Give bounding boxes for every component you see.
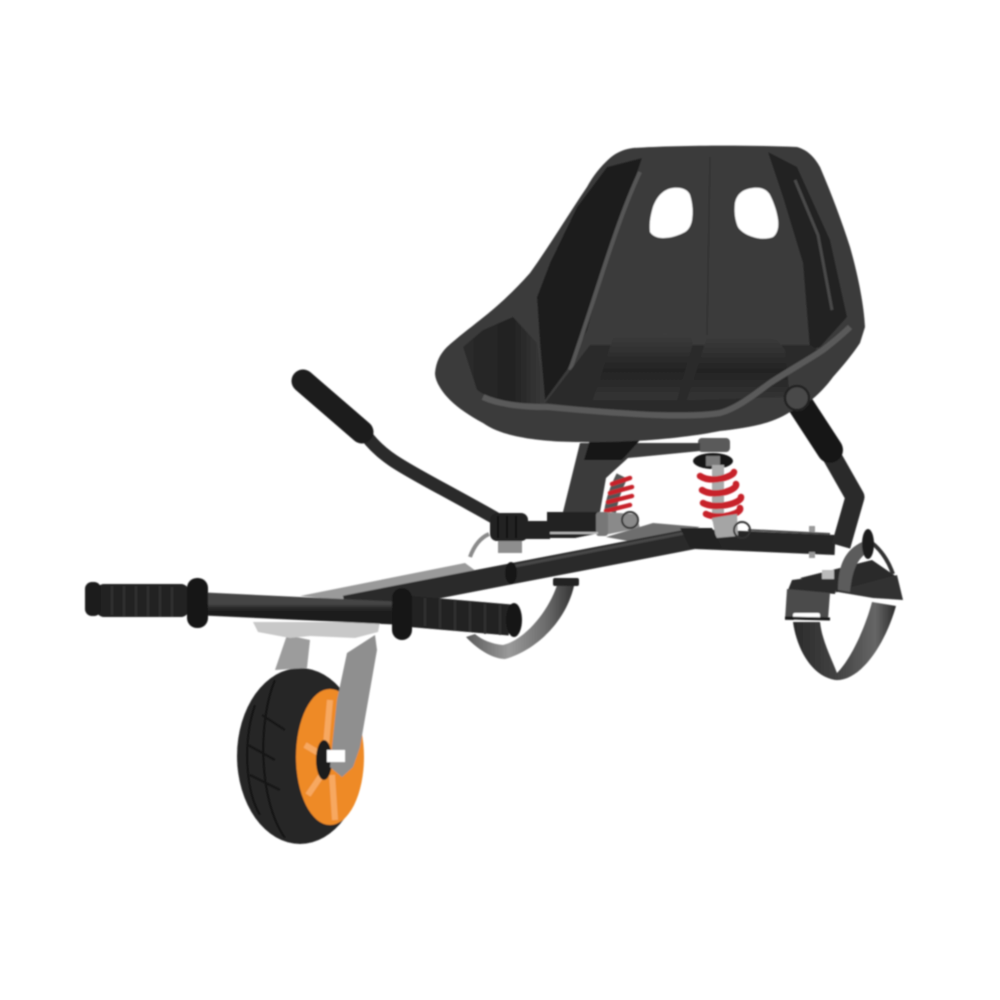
seat seam [707, 157, 710, 335]
seat pivot bolt [785, 386, 809, 410]
seat harness hole right [735, 188, 778, 239]
front fork [253, 622, 380, 777]
seat pan floor [545, 345, 820, 412]
seat left lobe [463, 317, 545, 407]
seat support bracket [563, 440, 700, 512]
steering lever [303, 381, 495, 518]
right foot bracket [785, 529, 903, 620]
seat shell [435, 146, 865, 442]
rear axle tube [695, 526, 835, 560]
rear seat support arm [800, 404, 855, 546]
seat back highlight [570, 172, 640, 370]
front wheel [237, 668, 364, 844]
seat cushions [593, 334, 693, 400]
lever hinge and knob [490, 512, 608, 553]
seat harness hole left [650, 188, 693, 238]
left suspension spring [602, 476, 640, 535]
left foot strap [466, 534, 579, 659]
seat right side channel [768, 152, 847, 350]
right suspension spring [693, 438, 750, 538]
front handlebar [85, 578, 522, 640]
seat left side channel [537, 158, 642, 400]
right foot strap [793, 602, 896, 680]
seat rim [483, 327, 850, 416]
main frame tube [300, 523, 722, 606]
